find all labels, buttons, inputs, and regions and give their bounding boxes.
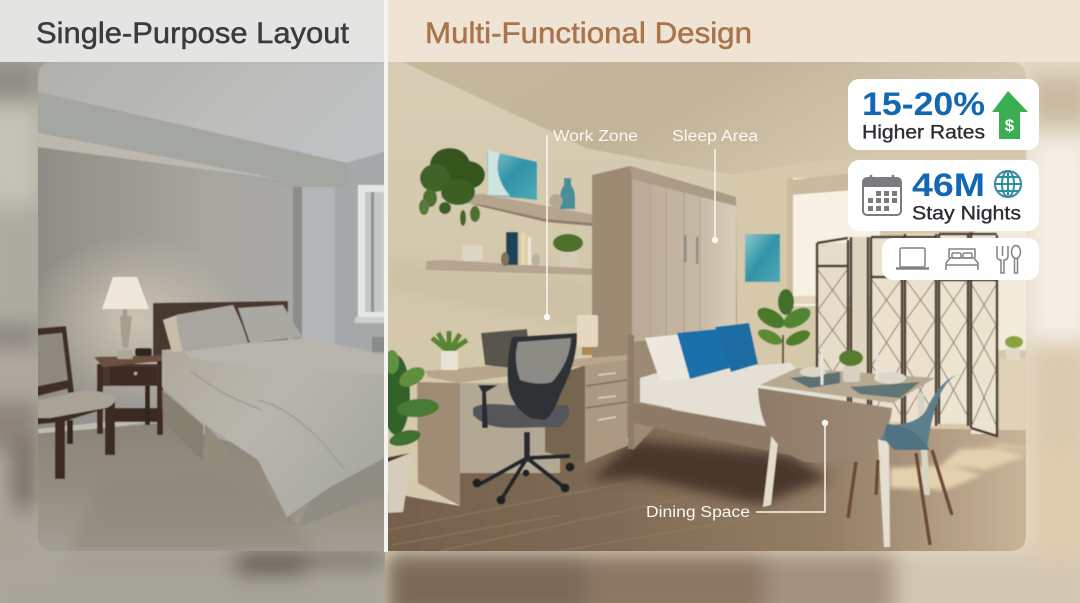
- stat card: stay nights: [848, 160, 1039, 231]
- icon: green up arrow with dollar: [992, 91, 1028, 139]
- label: higher rates: Higher Rates: [862, 122, 985, 144]
- icon: laptop: [896, 248, 929, 268]
- shadow on lower wall: [388, 260, 590, 330]
- bed skirt: [162, 390, 390, 527]
- icon: fork and spoon: [997, 246, 1020, 273]
- right window: [975, 160, 1031, 350]
- pillows: [645, 323, 758, 381]
- title: left: Single-Purpose Layout: [36, 17, 350, 50]
- nightstand: [94, 355, 163, 435]
- divider: [384, 0, 388, 552]
- title band: right: [385, 0, 1080, 62]
- label: stay nights: Stay Nights: [912, 202, 1021, 224]
- callout: sleep area: Sleep Area: [672, 128, 758, 145]
- laptop: [481, 329, 531, 370]
- back wall: [30, 140, 390, 440]
- folding screen: [816, 232, 997, 436]
- icon: bed: [946, 249, 978, 270]
- soffit light strip: [38, 134, 275, 178]
- icon card: room functions: [882, 238, 1039, 280]
- desk lamp: [577, 315, 598, 355]
- dining table: [758, 347, 935, 547]
- icon: green up arrow with dollar: $: [1005, 116, 1015, 135]
- callout: dining space: Dining Space: [646, 504, 750, 521]
- baseboard: [38, 421, 146, 434]
- callout: dining space: [646, 420, 828, 521]
- floor plant left: [382, 350, 440, 513]
- sun patches: [890, 443, 1026, 490]
- window: [355, 185, 388, 323]
- pillows: [163, 305, 302, 352]
- floor: [380, 425, 1030, 560]
- photo panel: single-purpose bedroom: [25, 62, 390, 560]
- photo panel: multi-functional room: [380, 55, 1040, 560]
- wall art: abstract teal: [487, 150, 537, 200]
- callout: sleep area: [672, 128, 758, 243]
- table lamp: [102, 277, 149, 359]
- desk: [417, 355, 627, 506]
- bed frame: [628, 335, 860, 463]
- potted plant on sill: [1005, 336, 1023, 360]
- floor shadow under bed: [590, 440, 830, 505]
- hanging plant on shelf: [419, 148, 485, 226]
- ceiling: [398, 60, 1030, 175]
- side wall: [335, 150, 390, 350]
- left wall: [388, 62, 502, 502]
- ceiling: [30, 62, 390, 163]
- lamp glow: [40, 249, 216, 390]
- wall column: [293, 187, 302, 347]
- wall art: square teal: [745, 234, 780, 282]
- alarm clock: [135, 348, 152, 356]
- side chair: [30, 326, 116, 479]
- floor planks: [388, 484, 652, 551]
- window: [787, 170, 880, 306]
- carpet floor: [38, 423, 384, 551]
- desk plant: [432, 331, 467, 370]
- back wall: [732, 150, 1026, 430]
- callout: work zone: [544, 128, 638, 320]
- duvet: [162, 338, 390, 517]
- title: right: Multi-Functional Design: [425, 17, 752, 50]
- background: blurred right scene: [385, 62, 1080, 603]
- stat card: higher rates: [848, 79, 1039, 150]
- lower shelf: [426, 260, 595, 275]
- icon: calendar: [863, 175, 901, 215]
- headboard: [153, 301, 288, 362]
- large floor plant: [754, 289, 814, 365]
- background: blurred left scene: [0, 62, 385, 603]
- icon: globe: [995, 171, 1021, 197]
- callout: work zone: Work Zone: [553, 128, 638, 145]
- stat: 46M: 46M: [912, 167, 985, 203]
- lower wall below window: [1000, 358, 1026, 430]
- upper shelf: [438, 194, 595, 226]
- vase and shelf decor: [462, 178, 583, 267]
- small wall object: [372, 337, 386, 352]
- stat: 15-20%: 15-20%: [862, 86, 985, 122]
- wall bed cabinet: [592, 166, 737, 450]
- soffit beam: [38, 93, 204, 154]
- title band: left: [0, 0, 385, 62]
- office chair: [472, 333, 577, 504]
- dining chair: [848, 375, 957, 545]
